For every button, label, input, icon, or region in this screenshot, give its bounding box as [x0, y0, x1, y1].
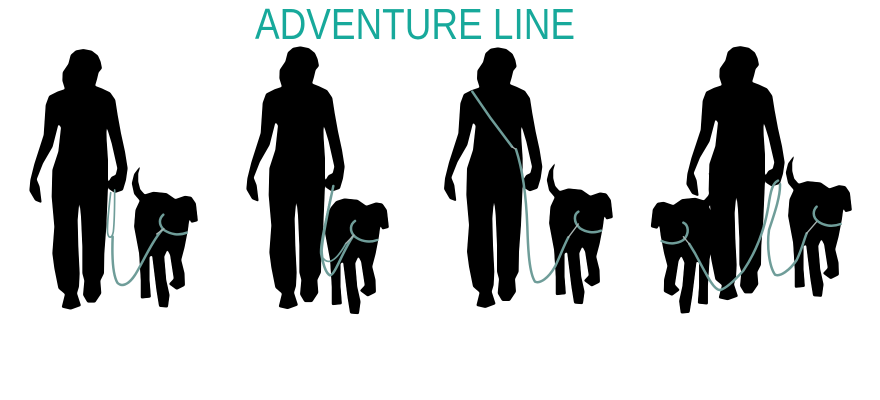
dog silhouette	[132, 166, 198, 307]
leash	[321, 186, 377, 275]
panel: hands-free cross-body leash with one dog	[444, 48, 613, 308]
left dog silhouette	[651, 172, 717, 313]
right dog silhouette	[786, 155, 852, 297]
panel: shortened leash with one dog	[247, 47, 389, 314]
leash	[472, 92, 601, 282]
leash	[662, 181, 841, 290]
dog silhouette	[547, 163, 613, 304]
woman silhouette	[247, 47, 344, 309]
woman silhouette	[687, 46, 784, 300]
leash	[107, 190, 187, 285]
panel: hand-held leash with one dog	[30, 49, 198, 309]
woman silhouette	[30, 49, 127, 309]
title: ADVENTURE LINE	[255, 0, 575, 49]
panel: coupled leash with two dogs	[651, 46, 852, 313]
woman silhouette	[444, 48, 542, 308]
dog silhouette	[325, 199, 389, 314]
